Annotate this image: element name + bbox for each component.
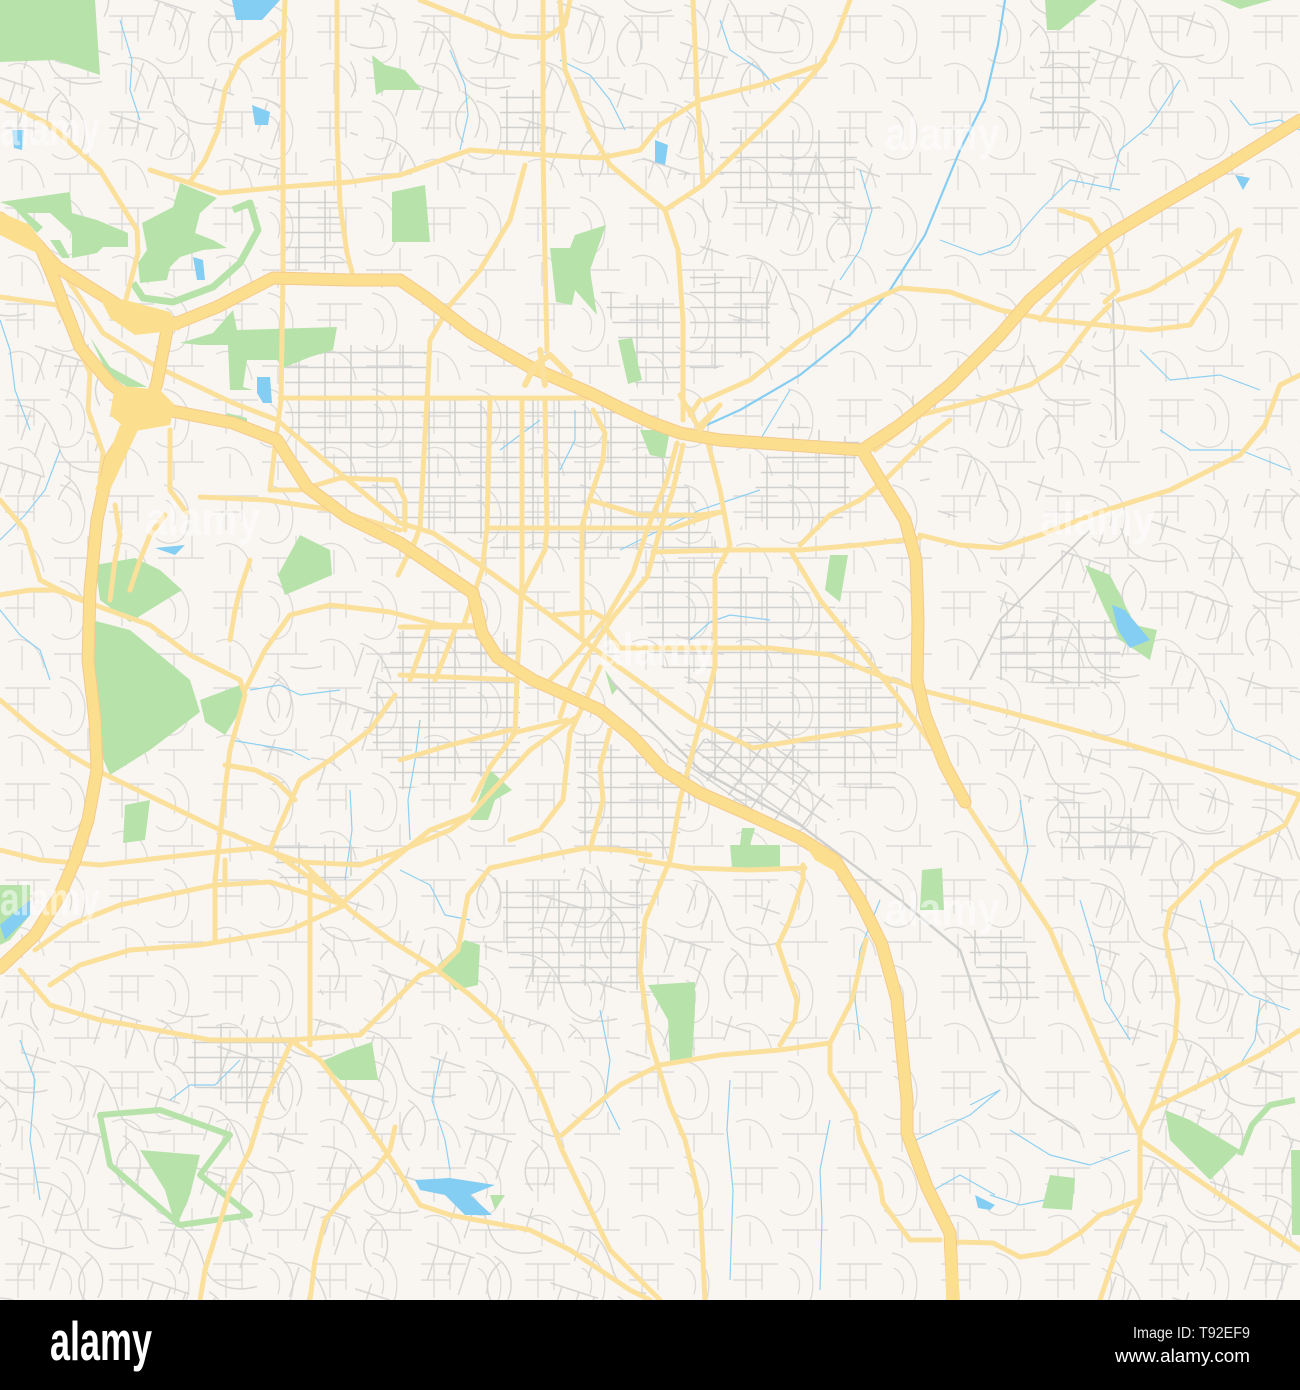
park: western large bbox=[90, 620, 200, 775]
interchange north centre bbox=[525, 350, 570, 385]
watermarks: alamy bbox=[885, 108, 1000, 160]
large creek bbox=[700, 0, 1005, 428]
park: top left bbox=[0, 0, 100, 75]
park: golf ring bbox=[133, 203, 258, 302]
footer logo: alamy bbox=[50, 1310, 152, 1372]
central street grids bbox=[180, 50, 1150, 1120]
watermarks: alamy bbox=[600, 623, 715, 675]
watermarks: alamy bbox=[145, 493, 260, 545]
park: south-east bbox=[1165, 1110, 1240, 1180]
watermarks: alamy bbox=[885, 883, 1000, 935]
watermarks bbox=[0, 103, 1155, 935]
park: north small bbox=[372, 55, 422, 95]
railway lines bbox=[610, 300, 1116, 1133]
watermarks: alamy bbox=[0, 103, 100, 155]
watermarks: alamy bbox=[1040, 493, 1155, 545]
image id: Image ID: T92EF9 bbox=[1133, 1325, 1250, 1342]
interchange north east bbox=[680, 395, 720, 430]
park: golf course north-west bbox=[138, 183, 227, 283]
watermarks: alamy bbox=[0, 873, 100, 925]
interchange south bbox=[945, 1235, 960, 1300]
footer bar bbox=[0, 1300, 1300, 1390]
interchange west bbox=[110, 385, 175, 432]
park: north-east corners bbox=[1045, 0, 1097, 30]
park: north-west wedge bbox=[0, 192, 128, 258]
park: west central bbox=[278, 535, 332, 595]
park: golf course centre bbox=[180, 310, 337, 390]
park: south central bbox=[438, 940, 480, 990]
website: www.alamy.com bbox=[1114, 1346, 1250, 1366]
park: east bbox=[1085, 565, 1157, 660]
park: south-west ring bbox=[100, 1110, 250, 1225]
park: north centre bbox=[550, 225, 606, 315]
